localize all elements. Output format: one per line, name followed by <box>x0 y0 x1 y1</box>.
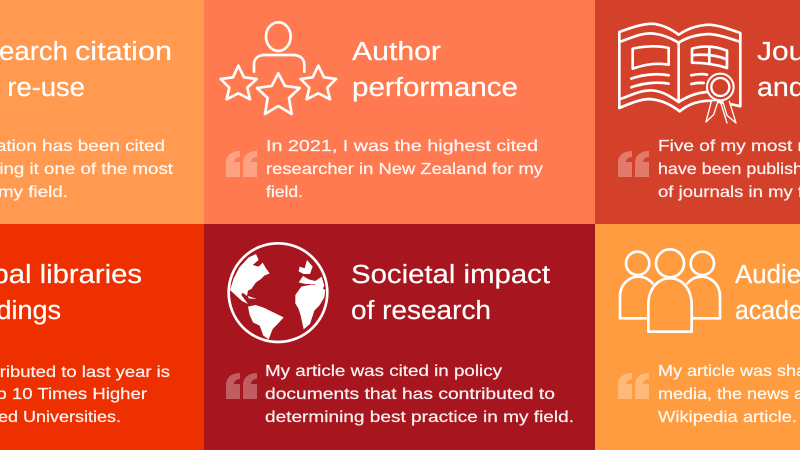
text block: societal quote: determining best practice in my field. <box>265 409 574 426</box>
heading: global libraries holdings <box>0 261 142 325</box>
panel: journal quality <box>595 0 800 224</box>
text block: author quote <box>266 138 543 201</box>
text block: author quote: researcher in New Zealand for my <box>266 161 543 178</box>
text block: author quote: In 2021, I was the highest cited <box>266 138 538 155</box>
text block: audience quote <box>658 363 800 426</box>
heading: audiences beyond academia <box>735 261 800 325</box>
text block: author quote: field. <box>266 184 303 201</box>
text block: citation quote <box>0 138 174 201</box>
heading: societal impact of research: Societal impact <box>351 261 550 289</box>
heading: author performance <box>352 38 518 102</box>
heading: author performance: Author <box>352 38 442 66</box>
panel: societal impact of research <box>204 224 595 450</box>
icon: quote mark <box>226 151 257 177</box>
heading: research citation and re-use: citation <box>75 38 172 66</box>
icon: open book with rosette <box>619 24 740 123</box>
heading: research citation and re-use <box>0 38 172 102</box>
icon: quote mark <box>226 373 257 399</box>
heading: author performance: performance <box>352 74 518 102</box>
panel: research citation and re-use <box>0 0 204 224</box>
text block: societal quote <box>265 363 574 426</box>
panel: audiences beyond academia <box>595 224 800 450</box>
text block: audience quote: Wikipedia article. <box>658 409 797 426</box>
text block: libraries quote <box>0 364 170 426</box>
heading: societal impact of research <box>351 261 550 325</box>
panel: global libraries holdings <box>0 224 204 450</box>
icon: quote mark <box>618 373 649 399</box>
text block: societal quote: My article was cited in policy <box>265 363 502 380</box>
heading: societal impact of research: of research <box>351 297 491 325</box>
icon: globe <box>229 243 327 342</box>
icon: person with three stars <box>221 22 336 114</box>
panel: author performance <box>204 0 595 224</box>
text block: societal quote: documents that has contributed to <box>265 386 555 403</box>
text block: journal quote <box>658 138 800 201</box>
icon: group of people <box>620 249 720 332</box>
heading: journal quality <box>757 38 800 102</box>
icon: quote mark <box>618 151 649 177</box>
